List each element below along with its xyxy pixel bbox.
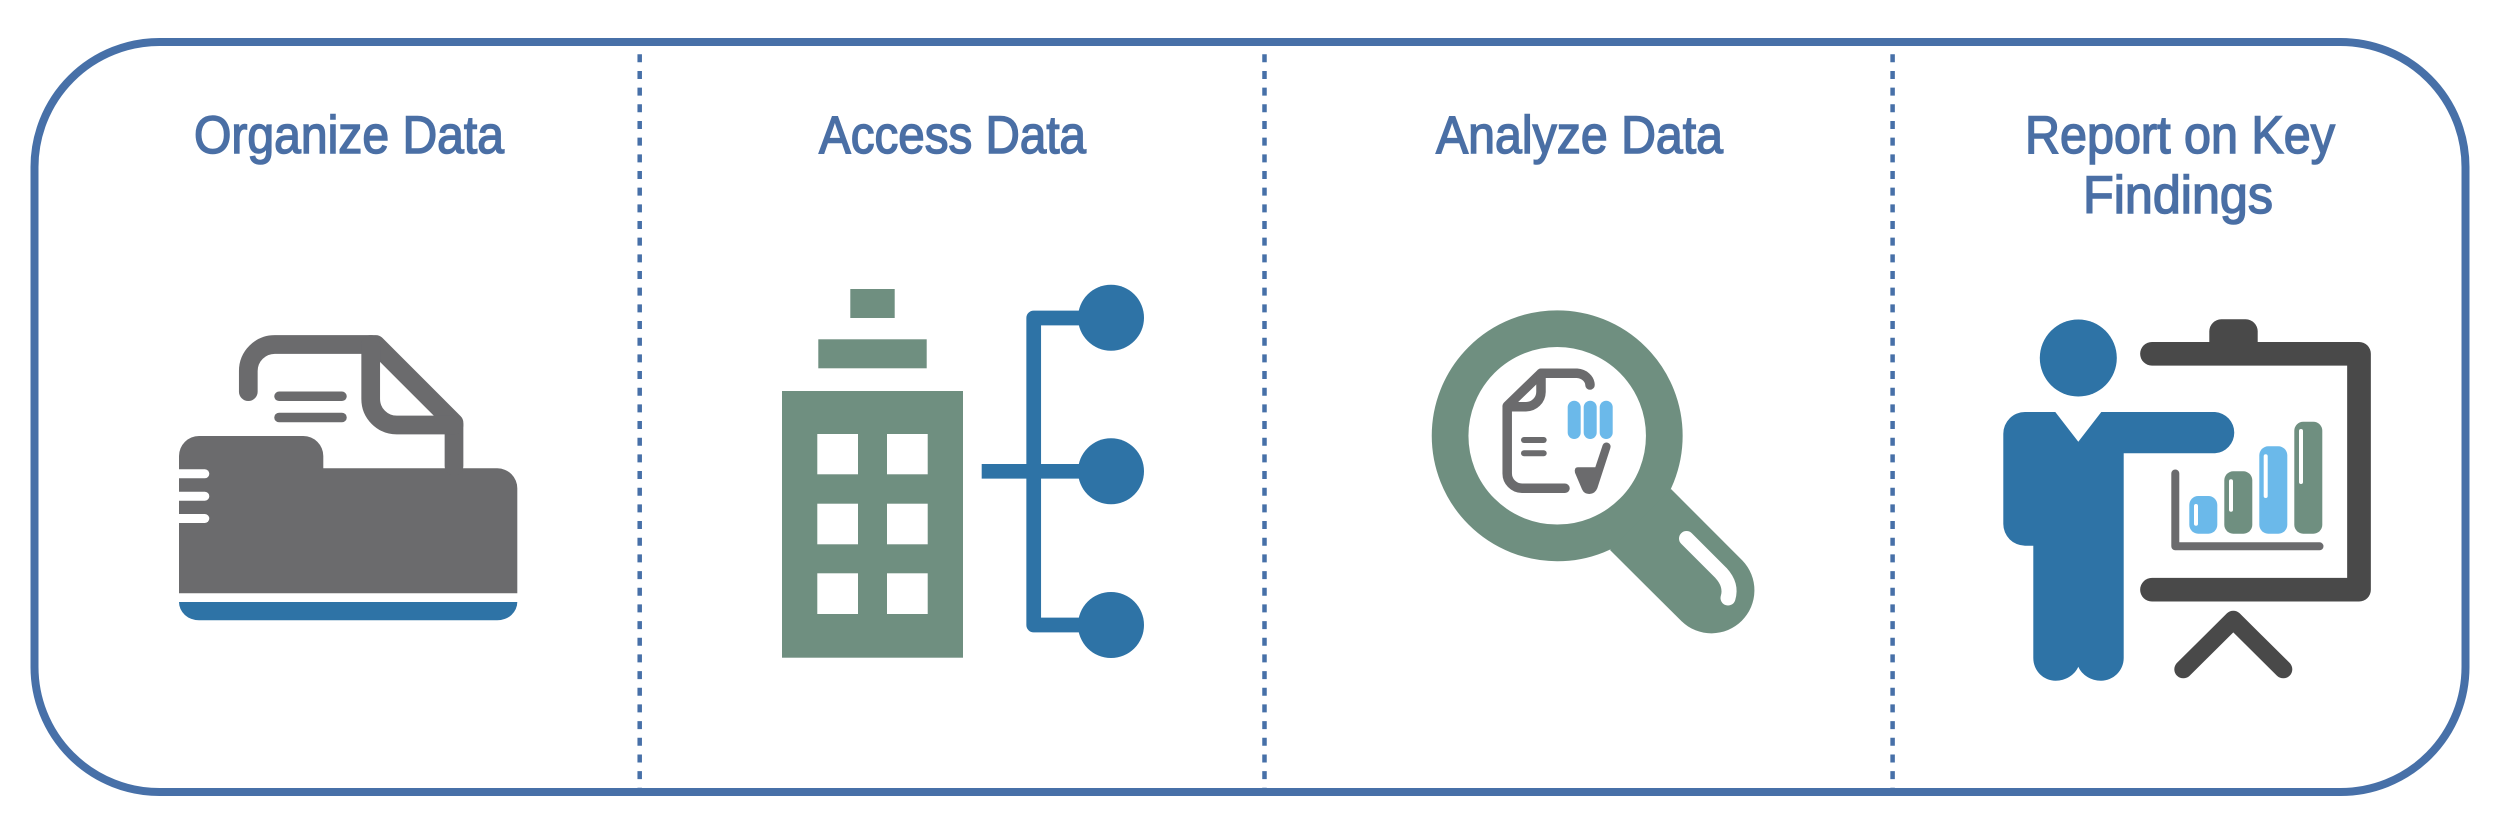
heading: Organize Data: Organize Data [194, 106, 504, 165]
heading: Report on Key Findings [2025, 106, 2335, 225]
heading: Access Data: Access Data [819, 106, 1086, 165]
heading: Analyze Data: Analyze Data [1436, 106, 1723, 165]
icon: file folder with document [170, 344, 517, 620]
icon: magnifying glass over document [1450, 329, 1754, 633]
heading: Report on Key Findings: Report on Key [2025, 106, 2335, 165]
heading: Report on Key Findings: Findings [2083, 166, 2273, 225]
icon: presenter with chart board [2003, 319, 2359, 681]
icon: building with network [782, 285, 1144, 658]
